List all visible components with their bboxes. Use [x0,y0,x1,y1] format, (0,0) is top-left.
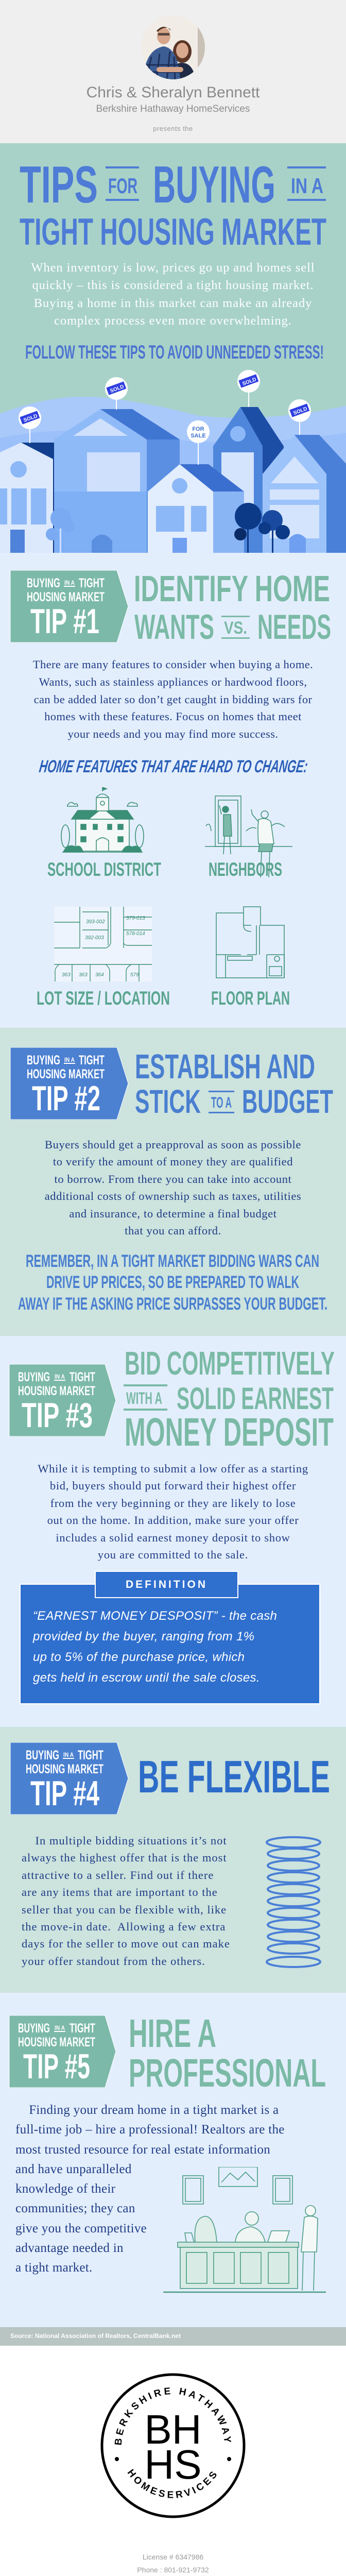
house E [263,435,326,553]
text: tip 5 body: communities; they can [15,2201,135,2215]
name: Chris & Sheralyn Bennett [86,84,260,101]
logo: BHHS: HS [144,2442,202,2487]
definition text [32,1609,277,1685]
illustration: houses: SOLD [241,377,257,387]
text: tip 1 body: your needs and you may find more success. [68,727,278,740]
banner: tip 5: TIGHT [70,2021,95,2036]
banner: tip 2: BUYING [27,1053,60,1067]
intro text: When inventory is low, prices go up and homes sell [31,261,315,275]
header panel [0,0,346,143]
heading: establish and stick to a budget: TO A [211,1094,232,1111]
icon: lot map: 364 [95,972,104,978]
banner: tip 4: BUYING [26,1748,59,1762]
logo: BHHS: BH [144,2406,202,2452]
heading: bid competitively: WITH A [126,1389,162,1408]
house B [54,409,147,553]
icon: neighbors [205,795,292,877]
definition text: provided by the buyer, ranging from 1% [33,1630,254,1643]
title: FOR [108,174,137,198]
contact info: License # 6347986 [143,2553,203,2561]
banner: tip 1: BUYING [27,576,60,590]
icon: lot map: 392-003 [85,935,104,941]
banner: tip 5 [9,2015,116,2088]
heading: establish and stick to a budget: STICK [135,1083,201,1120]
text: tip 2 body: additional costs of ownership such as taxes, utilities [45,1190,301,1202]
text: tip 4 body: always the highest offer that is the most [22,1851,227,1864]
definition box [20,1571,320,1704]
heading: identify home wants vs needs: VS. [224,618,247,638]
banner: tip 2: TIP #2 [32,1079,100,1118]
illustration: houses: FOR [192,426,204,432]
text: tip 5 body: full-time job – hire a professional! Realtors are the [15,2123,285,2137]
footer panel [0,2346,346,2576]
text: tip 4 body: attractive to a seller. Find out if there [22,1869,214,1882]
text: tip 5 body: Finding your dream home in a tight market is a [29,2103,279,2117]
source bar: Source: National Association of Realtors, CentralBank.net [10,2332,181,2340]
text: tip 5 body: advantage needed in [15,2241,124,2255]
logo: BHHS: HOMESERVICES [128,2469,216,2498]
intro text: Buying a home in this market can make an already [34,296,312,310]
intro text [31,261,315,328]
text: tip 5 body: knowledge of their [15,2182,115,2196]
house C [148,464,213,553]
text: tip 3 body: includes a solid earnest money deposit to show [56,1531,290,1544]
icon: lot map [54,907,152,981]
text: tip 5 body: give you the competitive [15,2222,147,2235]
banner: tip 2 [10,1047,129,1120]
text: tip 5 body [15,2103,285,2275]
illustration: office [163,2167,326,2293]
text: tip 1 body: Wants, such as stainless appliances or hardwood floors, [39,675,307,688]
banner: tip 2: IN A [64,1056,75,1063]
text: tip 4 body: your offer standout from the others. [22,1955,205,1968]
signs [30,381,300,465]
illustration: houses: SOLD [109,384,125,394]
contact info [137,2553,209,2574]
banner: tip 4: IN A [63,1751,74,1758]
text: tip 4 body: seller that you can be flexible with, like [22,1903,227,1916]
definition text: up to 5% of the purchase price, which [33,1650,245,1664]
heading: identify home wants vs needs [134,569,331,646]
icon: lot map: 363 [62,972,71,978]
banner: tip 4: TIGHT [78,1748,103,1762]
banner: tip 3: TIP #3 [22,1396,93,1435]
illustration: houses [0,370,346,553]
banner: tip 1 [10,570,129,642]
text: tip 5 body: most trusted resource for real estate information [15,2143,270,2157]
icon: floor plan [216,906,285,978]
banner: tip 5: TIP #5 [23,2047,90,2086]
source bar [0,2327,346,2346]
text: tip 3 body: you are committed to the sale. [98,1548,248,1561]
text: tip 1 body: homes with these features. Focus on homes that meet [44,710,302,723]
banner: tip 1: IN A [64,579,75,586]
logo: BHHS: BERKSHIRE HATHAWAY [114,2387,231,2445]
illustration: houses: SOLD [23,413,38,423]
heading: identify home wants vs needs: WANTS [134,607,214,646]
definition tab: DEFINITION [126,1579,207,1590]
text: tip 3 body [38,1462,308,1561]
icon: lot map: 579-013 [126,916,145,921]
text: tip 2 body: Buyers should get a preapproval as soon as possible [45,1138,301,1151]
trees [234,503,290,553]
banner: tip 3: BUYING [18,1370,50,1384]
banner: tip 4 [10,1742,129,1815]
text: tip 4 body: In multiple bidding situations it’s not [35,1834,227,1847]
text: tip 4 body: are any items that are important to the [22,1886,218,1899]
text: tip 3 body: from the very beginning or they are likely to lose [50,1497,296,1510]
text: tip 5 body: a tight market. [15,2261,93,2275]
text: tip 1 body [33,658,313,740]
panel: tip 4 [0,1727,346,1993]
banner: tip 2: TIGHT [79,1053,105,1067]
title: IN A [291,174,323,198]
label: neighbors: NEIGHBORS [209,859,282,880]
icon: lot map: 393-002 [86,919,105,925]
icon: school [61,787,144,853]
text: tip 2 body: to borrow. From there you can take into account [55,1173,291,1185]
text: tip 2 body: that you can afford. [125,1224,221,1237]
icon: spring [266,1836,321,1968]
house A [0,443,53,553]
panel: tip 5 [0,1993,346,2327]
company: Berkshire Hathaway HomeServices [96,104,250,114]
heading: bid competitively [124,1345,335,1454]
panel: tip 3 [0,1336,346,1727]
definition text: gets held in escrow until the sale closes. [33,1671,260,1685]
text: tip 1 body: There are many features to consider when buying a home. [33,658,313,671]
banner: tip 1: TIGHT [79,576,105,590]
icon: lot map: 578-014 [126,931,145,937]
text: tip 4 body [22,1834,230,1968]
illustration: houses: SOLD [292,406,308,416]
house D [213,407,263,553]
label: floor plan: FLOOR PLAN [211,988,290,1009]
callout: remember [18,1251,327,1314]
panel: tip 1 [0,553,346,1028]
logo: BHHS [101,2373,245,2518]
banner: tip 4: TIP #4 [30,1774,99,1813]
icon: lot map: 363 [79,972,88,978]
label: school district: SCHOOL DISTRICT [47,859,161,880]
banner: tip 3: TIGHT [70,1370,95,1384]
presents the: presents the [153,125,193,132]
banner: tip 3 [9,1364,116,1436]
text: tip 4 body: the move-in date. Allowing a few extra [22,1920,226,1933]
heading: establish and stick to a budget [135,1047,333,1120]
heading: hire a professional: HIRE A [129,2011,216,2056]
title [20,156,326,253]
intro text: quickly – this is considered a tight housing market. [32,278,314,292]
panel: intro [0,143,346,553]
label: lot size / location: LOT SIZE / LOCATION [37,988,170,1009]
title: TIPS [20,156,98,214]
banner: tip 5: BUYING [18,2021,50,2036]
text: tip 2 body [45,1138,301,1237]
panel: tip 2 [0,1028,346,1336]
definition text: “EARNEST MONEY DESPOSIT” - the cash [33,1609,277,1623]
text: tip 2 body: to verify the amount of money they are qualified [53,1155,293,1168]
text: tip 1 body: can be added later so don’t get caught in bidding wars for [34,693,312,706]
text: tip 5 body: and have unparalleled [15,2162,132,2176]
banner: tip 5: IN A [55,2024,65,2031]
text: tip 3 body: out on the home. In addition, make sure your offer [47,1514,299,1527]
text: tip 3 body: bid, buyers should put forward their highest offer [50,1479,296,1492]
heading: hire a professional [129,2011,326,2095]
icon: lot map: 579 [130,972,139,978]
definition tab [95,1571,238,1598]
text: tip 2 body: and insurance, to determine a final budget [69,1207,277,1220]
photo: agents [141,15,205,79]
contact info: Phone : 801-921-9732 [137,2566,209,2574]
banner: tip 3: IN A [55,1373,65,1380]
illustration: houses: SALE [191,433,206,439]
text: tip 4 body: days for the seller to move out can make [22,1937,230,1950]
intro text: complex process even more overwhelming. [54,314,292,328]
text: tip 3 body: While it is tempting to submit a low offer as a starting [38,1462,308,1475]
banner: tip 1: TIP #1 [30,602,99,641]
